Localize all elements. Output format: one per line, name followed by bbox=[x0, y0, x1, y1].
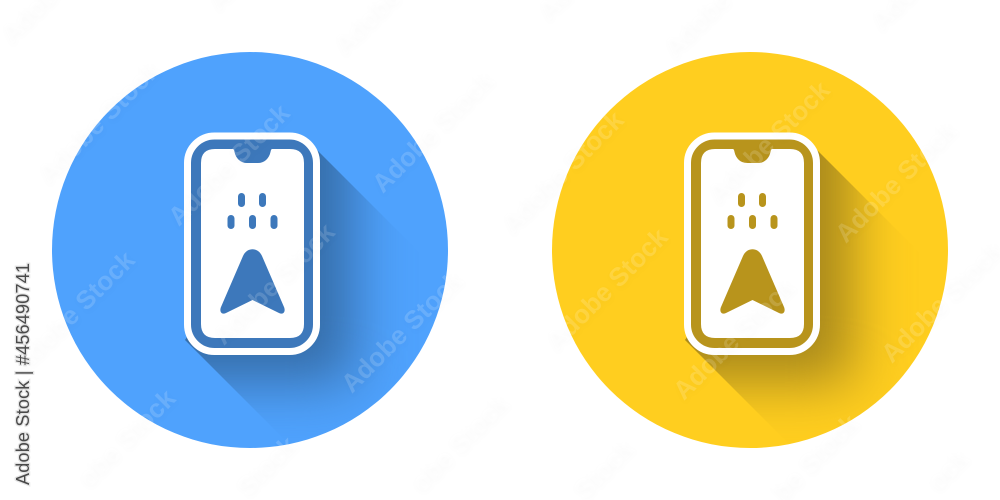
icon: smartphone with navigation arrow bbox=[188, 136, 316, 352]
stock watermarks: ock bbox=[921, 443, 975, 496]
stock watermarks: Adobe Stock bbox=[162, 97, 296, 231]
long shadow bbox=[185, 150, 387, 418]
panel: yellow circle icon bbox=[552, 52, 948, 448]
stock watermarks: obe Stock bbox=[72, 383, 182, 492]
stock watermarks: obe Stock bbox=[405, 388, 515, 497]
icon: smartphone with navigation arrow bbox=[688, 136, 816, 352]
stock watermarks: Adobe Stock bbox=[335, 264, 469, 398]
stock watermarks: Adobe Stock bbox=[540, 221, 674, 355]
blue circle background bbox=[52, 52, 448, 448]
stock watermarks: Adobe Stock bbox=[667, 271, 801, 405]
stock watermarks: Stock bbox=[231, 430, 303, 500]
stock watermarks: Adobe Stock bbox=[207, 216, 341, 350]
stock watermarks: Adobe Stock bbox=[7, 244, 141, 378]
yellow circle background bbox=[552, 52, 948, 448]
stock watermarks: Adobe Stock bbox=[496, 104, 630, 238]
stock watermarks: Adobe Stock bbox=[366, 64, 500, 198]
stock watermarks: Adobe Stock bbox=[702, 74, 836, 208]
stock watermarks: Adobe Stock bbox=[32, 54, 166, 188]
long shadow bbox=[685, 150, 887, 418]
stock watermarks: Adobe Stock bbox=[829, 114, 963, 248]
panel: blue circle icon bbox=[52, 52, 448, 448]
stock id caption: Adobe Stock | #456490741 bbox=[13, 263, 33, 485]
